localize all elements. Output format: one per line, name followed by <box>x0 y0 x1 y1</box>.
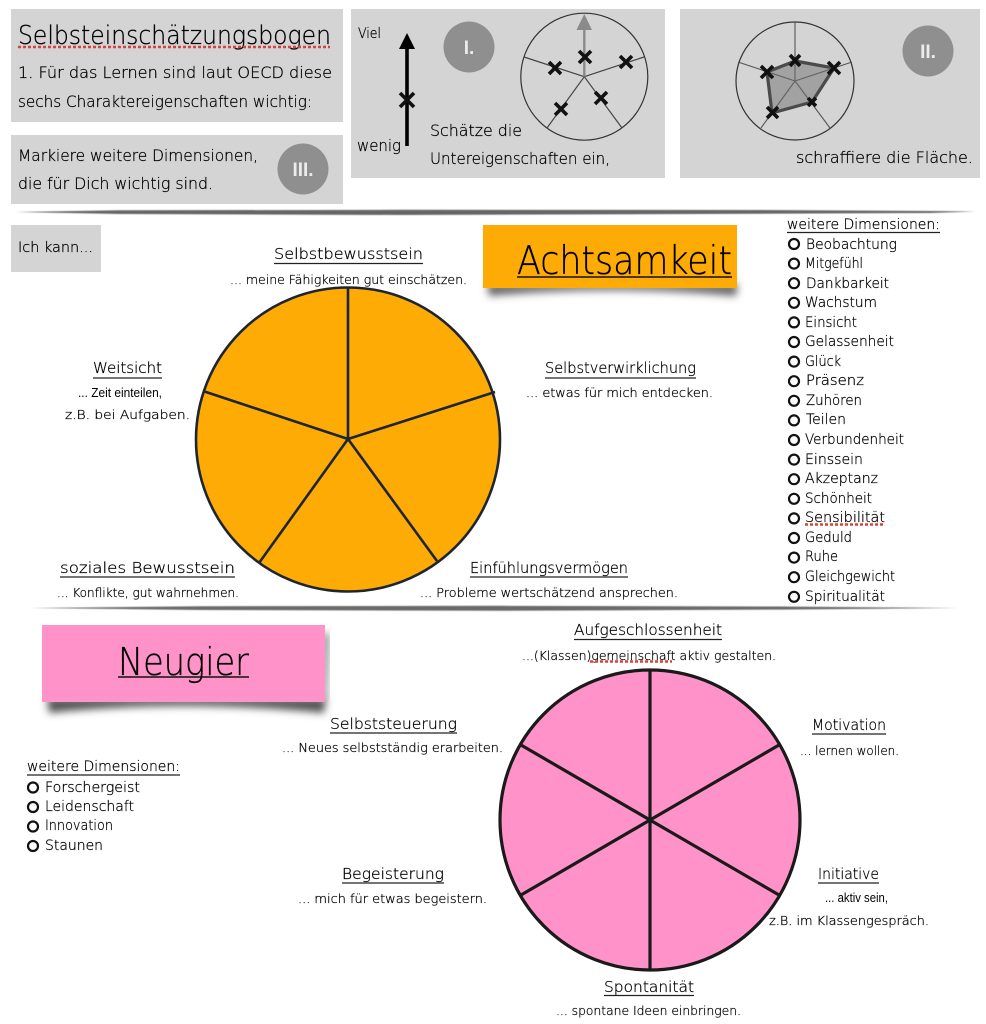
list: weitere Dimensionen Achtsamkeit <box>787 217 940 605</box>
label: soziales Bewusstsein: soziales Bewusstsein <box>60 559 235 577</box>
panel: title and intro <box>11 9 343 122</box>
label: Selbststeuerung: ... Neues selbstständig erarbeiten. <box>282 740 503 755</box>
label: Ich kann <box>11 225 101 272</box>
title: Selbsteinschätzungsbogen <box>18 21 331 51</box>
step I text: Schätze die <box>430 121 522 140</box>
heading: Neugier <box>42 625 329 713</box>
list: weitere Dimensionen Achtsamkeit: Einsicht <box>805 315 857 331</box>
list: weitere Dimensionen Achtsamkeit: Schönheit <box>805 491 872 507</box>
scale labels: wenig <box>357 136 401 155</box>
list: weitere Dimensionen Achtsamkeit: Gleichgewicht <box>805 569 895 585</box>
label: soziales Bewusstsein <box>57 559 239 600</box>
label: Einfühlungsvermögen: Einfühlungsvermögen <box>470 559 628 577</box>
list: weitere Dimensionen Achtsamkeit: Mitgefühl <box>805 256 863 272</box>
list: weitere Dimensionen Achtsamkeit: Geduld <box>805 530 852 546</box>
label: Spontanität: Spontanität <box>604 978 694 996</box>
badge I <box>444 22 494 72</box>
label: Begeisterung: ... mich für etwas begeistern. <box>298 891 487 906</box>
list: weitere Dimensionen Achtsamkeit: Glück <box>805 354 841 370</box>
label: Selbstverwirklichung <box>526 359 713 400</box>
list: weitere Dimensionen Neugier: Staunen <box>45 838 103 854</box>
list: weitere Dimensionen Neugier: Leidenschaft <box>45 799 134 815</box>
label: Motivation <box>800 716 899 758</box>
list: weitere Dimensionen Achtsamkeit: Beobachtung <box>806 237 897 253</box>
label: Ich kann: Ich kann... <box>18 240 93 256</box>
label: Einfühlungsvermögen <box>420 559 678 600</box>
label: Initiative: z.B. im Klassengespräch. <box>769 913 929 928</box>
badge II: II. <box>920 42 936 63</box>
step III text: Markiere weitere Dimensionen, <box>18 146 258 165</box>
list: weitere Dimensionen Achtsamkeit: Spiritualität <box>805 589 885 605</box>
step I text: Untereigenschaften ein, <box>430 149 610 168</box>
label: Selbststeuerung <box>282 715 503 755</box>
list: weitere Dimensionen Achtsamkeit: Dankbarkeit <box>806 276 889 292</box>
list: weitere Dimensionen Achtsamkeit: Präsenz <box>806 373 864 389</box>
step III text <box>18 146 258 193</box>
label: Selbstbewusstsein: Selbstbewusstsein <box>274 245 423 263</box>
list: weitere Dimensionen Achtsamkeit: Akzeptanz <box>805 471 878 487</box>
label: Spontanität <box>556 978 741 1018</box>
list: weitere Dimensionen Achtsamkeit: Einssein <box>805 452 863 468</box>
chart: Neugier pie <box>500 670 800 970</box>
step I text <box>430 121 610 168</box>
list: weitere Dimensionen Neugier <box>27 759 180 854</box>
label: Initiative <box>769 865 929 928</box>
list: weitere Dimensionen Achtsamkeit: Ruhe <box>805 549 838 565</box>
label: Selbstbewusstsein: ... meine Fähigkeiten gut einschätzen. <box>230 272 467 287</box>
icon: scale arrow with cross <box>399 33 415 146</box>
list: weitere Dimensionen Neugier: Forschergeist <box>45 780 140 796</box>
badge III <box>278 144 328 194</box>
panel: step III <box>11 135 343 204</box>
heading: Neugier: Neugier <box>118 640 249 684</box>
list: weitere Dimensionen Achtsamkeit: Gelassenheit <box>805 334 894 350</box>
label: Initiative: ... aktiv sein, <box>825 891 888 905</box>
label: Weitsicht: ... Zeit einteilen, <box>78 386 162 400</box>
panel: step I <box>351 9 665 178</box>
badge II <box>902 26 954 76</box>
label: Selbstbewusstsein <box>230 245 467 287</box>
chart: Achtsamkeit pie <box>196 288 500 592</box>
label: Aufgeschlossenheit: ...(Klassen)gemeinschaft aktiv gestalten. <box>522 648 776 663</box>
label: Spontanität: ... spontane Ideen einbringen. <box>556 1003 741 1018</box>
step III text: die für Dich wichtig sind. <box>18 174 213 193</box>
list: weitere Dimensionen Achtsamkeit: weitere Dimensionen: <box>787 217 940 233</box>
label: Weitsicht: z.B. bei Aufgaben. <box>65 407 190 422</box>
label: Motivation: ... lernen wollen. <box>800 743 899 758</box>
intro text: sechs Charaktereigenschaften wichtig: <box>18 92 312 111</box>
label: Begeisterung: Begeisterung <box>342 865 444 883</box>
label: Einfühlungsvermögen: ... Probleme wertschätzend ansprechen. <box>420 585 678 600</box>
panel: step II <box>680 9 980 178</box>
chart: example pie with shaded area <box>736 22 854 140</box>
label: Aufgeschlossenheit <box>522 621 776 663</box>
list: weitere Dimensionen Neugier: Innovation <box>45 818 113 834</box>
scale labels <box>357 26 401 155</box>
label: Aufgeschlossenheit: Aufgeschlossenheit <box>574 621 722 639</box>
list: weitere Dimensionen Achtsamkeit: Zuhören <box>806 393 862 409</box>
label: Motivation: Motivation <box>812 716 886 734</box>
list: weitere Dimensionen Achtsamkeit: Verbundenheit <box>805 432 904 448</box>
list: weitere Dimensionen Achtsamkeit: Sensibilität <box>805 510 885 526</box>
label: Selbstverwirklichung: ... etwas für mich entdecken. <box>526 385 713 400</box>
chart: example pie with crosses <box>521 13 648 140</box>
step II text: schraffiere die Fläche. <box>796 148 973 167</box>
intro text: 1. Für das Lernen sind laut OECD diese <box>18 63 332 82</box>
badge III: III. <box>292 160 314 181</box>
label: Initiative: Initiative <box>818 865 879 883</box>
scale labels: Viel <box>358 26 381 42</box>
label: Selbstverwirklichung: Selbstverwirklichung <box>545 359 696 377</box>
list: weitere Dimensionen Neugier: weitere Dimensionen: <box>27 759 180 775</box>
list: weitere Dimensionen Achtsamkeit: Teilen <box>806 412 846 428</box>
label: Weitsicht <box>65 359 190 422</box>
label: soziales Bewusstsein: ... Konflikte, gut wahrnehmen. <box>57 585 239 600</box>
heading: Achtsamkeit: Achtsamkeit <box>517 239 732 284</box>
heading: Achtsamkeit <box>483 225 738 296</box>
list: weitere Dimensionen Achtsamkeit: Wachstum <box>805 295 877 311</box>
badge I: I. <box>464 38 474 59</box>
label: Weitsicht: Weitsicht <box>93 359 162 377</box>
intro text <box>18 63 332 111</box>
label: Begeisterung <box>298 865 487 906</box>
label: Selbststeuerung: Selbststeuerung <box>330 715 457 733</box>
